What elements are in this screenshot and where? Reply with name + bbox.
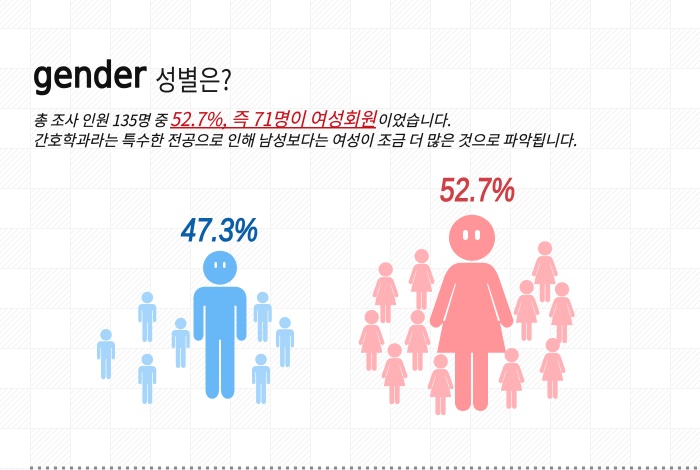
percentage: female: 52.7% (438, 172, 517, 209)
small men (97, 292, 294, 404)
red underline (170, 127, 376, 128)
male figures group (97, 212, 294, 404)
logo word: gender: gender (33, 55, 146, 96)
line 2: 간호학과라는 특수한 전공으로 인해 남성보다는 여성이 조금 더 많은 것으로 파악됩니다. (33, 129, 577, 151)
large woman icon (430, 215, 513, 411)
percentage: male: 47.3% (181, 212, 258, 248)
small women in front (428, 348, 525, 415)
heading: 성별은?: 성별은? (155, 59, 232, 99)
line 1 black lead: 총 조사 인원 135명 중 (33, 109, 169, 131)
small women (359, 241, 575, 404)
large man icon (194, 251, 246, 399)
line 1 ending: 이었습니다. (377, 109, 451, 131)
female figures group (359, 172, 575, 415)
highlighted red statistic: 52.7%, 즉 71명이 여성회원 (170, 105, 377, 132)
dotted bottom rule (30, 466, 700, 470)
intro text block (33, 105, 577, 151)
title (33, 55, 232, 99)
